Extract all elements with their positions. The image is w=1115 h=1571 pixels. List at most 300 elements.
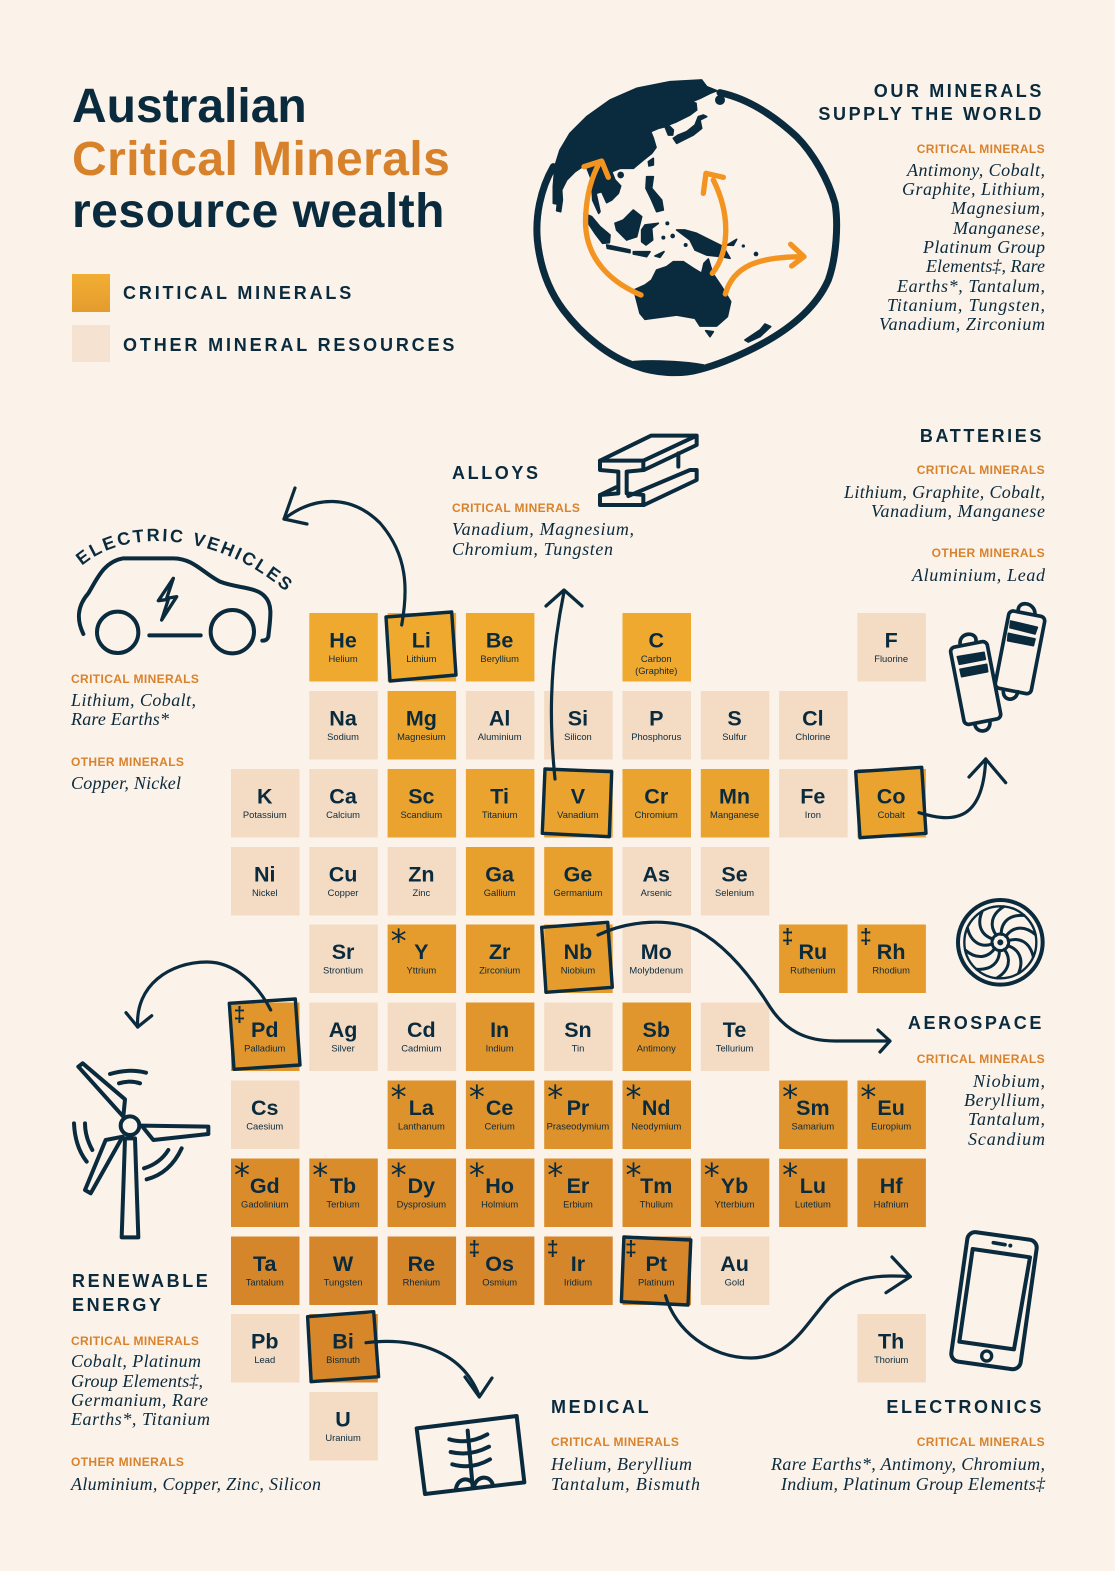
tile: Ga: Ga (485, 862, 515, 886)
tile: Ho: * (469, 1156, 485, 1194)
panel: batteries: BATTERIES (920, 426, 1044, 446)
panel: electric vehicles: Rare Earths* (70, 709, 169, 729)
tile: Na: Sodium (327, 731, 359, 742)
tile: Ti (466, 769, 534, 838)
tile: Ru: Ruthenium (790, 964, 836, 976)
tile: La: * (391, 1078, 407, 1116)
tile: Er: Er (567, 1174, 590, 1198)
panel: aerospace: Tantalum, (968, 1109, 1045, 1129)
tile: Mn (701, 769, 769, 838)
panel: our minerals supply the world: Graphite, Lithium, (902, 179, 1045, 199)
tile: Dy (388, 1156, 456, 1227)
tile: Gd: Gd (250, 1174, 280, 1198)
tile: Rh: ‡ (860, 926, 872, 948)
panel: electronics: ELECTRONICS (886, 1397, 1044, 1417)
panel: renewable energy: ENERGY (72, 1295, 164, 1315)
tile: Na: Na (329, 706, 358, 730)
tile: Si: Si (568, 706, 588, 730)
tile: C: (Graphite) (635, 665, 677, 676)
tile: Al: Al (489, 706, 510, 730)
panel: aerospace: CRITICAL MINERALS (917, 1052, 1045, 1066)
tile: Cl: Cl (802, 706, 824, 730)
periodic table tiles (231, 613, 926, 1460)
panel: renewable energy (70, 1271, 321, 1494)
panel: renewable energy: RENEWABLE (72, 1271, 210, 1291)
tile: Ta: Ta (253, 1252, 278, 1276)
tile: Cl: Chlorine (795, 731, 830, 742)
tile: Sn: Sn (564, 1018, 592, 1042)
tile: Hf (857, 1158, 926, 1227)
tile: Se: Se (721, 862, 748, 886)
arrow: cobalt to batteries (919, 759, 1006, 818)
tile: F (857, 613, 926, 682)
legend: CRITICAL MINERALS (123, 283, 354, 303)
tile: Pd: Palladium (244, 1042, 286, 1054)
tile: Sm: Sm (796, 1096, 830, 1120)
tile: Au: Gold (725, 1276, 744, 1288)
tile: Cu: Cu (329, 862, 357, 886)
panel: our minerals supply the world: Manganese, (952, 218, 1045, 238)
tile: Ru: Ru (799, 940, 827, 964)
icon: wind turbine (74, 1063, 208, 1237)
tile: Y: Yttrium (406, 964, 436, 976)
tile: S: S (727, 706, 742, 730)
tile: Ni (231, 847, 300, 916)
tile: Tm: * (626, 1156, 642, 1194)
tile: He (309, 613, 378, 682)
tile: Ge: Germanium (553, 887, 603, 898)
tile: Tb: * (312, 1156, 328, 1194)
panel: our minerals supply the world: Platinum Group (922, 237, 1045, 257)
tile: Mn: Mn (719, 784, 750, 808)
tile: Ca (309, 769, 378, 838)
arrow: niobium to aerospace (598, 922, 890, 1052)
tile: Ca: Ca (329, 784, 358, 808)
tile: Sc (388, 769, 456, 838)
tile: Eu: * (860, 1078, 876, 1116)
tile: Dy: Dysprosium (397, 1198, 446, 1210)
tile: Te (701, 1002, 769, 1071)
tile: Ge (544, 847, 613, 916)
panel: our minerals supply the world: Antimony, Cobalt, (906, 160, 1045, 180)
panel: our minerals supply the world: Earths*, Tantalum, (896, 276, 1045, 296)
tile: Ce: * (469, 1078, 485, 1116)
tile: Sb: Sb (643, 1018, 670, 1042)
panel: batteries: Vanadium, Manganese (871, 501, 1045, 521)
tile: Cr: Cr (644, 784, 669, 808)
panel: our minerals supply the world: CRITICAL MINERALS (917, 142, 1045, 156)
tile: Pd: Pd (251, 1018, 278, 1042)
tile: Sr (309, 924, 378, 993)
icon: batteries (950, 604, 1045, 731)
tile: Tb: Tb (330, 1174, 356, 1198)
panel: our minerals supply the world: SUPPLY THE WORLD (818, 104, 1044, 124)
tile: Cd: Cd (407, 1018, 436, 1042)
panel: aerospace: Beryllium, (964, 1090, 1045, 1110)
tile: P (622, 691, 691, 760)
tile: Eu (857, 1078, 926, 1149)
tile: Sc: Sc (408, 784, 435, 808)
panel: alloys: ALLOYS (452, 463, 541, 483)
tile: He: He (329, 628, 357, 652)
tile: Te: Tellurium (716, 1042, 753, 1054)
tile: Ti: Ti (490, 784, 509, 808)
tile: Lu: Lu (800, 1174, 826, 1198)
tile: Lu: Lutetium (795, 1198, 831, 1210)
title (72, 80, 450, 238)
tile: Zr: Zirconium (479, 964, 520, 976)
tile: In (466, 1002, 534, 1071)
tile: Eu: Europium (871, 1120, 911, 1132)
panel: renewable energy: CRITICAL MINERALS (71, 1334, 199, 1348)
tile: Ce: Cerium (485, 1120, 515, 1132)
tile: V: Vanadium (557, 809, 599, 820)
panel: electric vehicles: CRITICAL MINERALS (71, 672, 199, 686)
tile: Te: Te (723, 1018, 746, 1042)
panel: aerospace (908, 1013, 1045, 1149)
legend: OTHER MINERAL RESOURCES (123, 335, 457, 355)
tile: In: In (490, 1018, 509, 1042)
tile: Bi: Bi (332, 1330, 354, 1354)
tile: Fe: Fe (800, 784, 825, 808)
panel: electronics: Rare Earths*, Antimony, Chromium, (770, 1454, 1045, 1474)
tile: Cs: Cs (251, 1096, 279, 1120)
tile: P: P (649, 706, 663, 730)
tile: Hf: Hf (880, 1174, 903, 1198)
tile: Er: Erbium (563, 1198, 593, 1210)
tile: Pt (622, 1236, 691, 1305)
tile: Ru (779, 924, 848, 993)
highlight frames on featured elements (229, 612, 926, 1382)
panel: batteries: Aluminium, Lead (911, 565, 1046, 585)
tile: Th: Thorium (874, 1354, 909, 1365)
tile: C: C (648, 628, 664, 652)
tile: Nb (544, 924, 613, 993)
panel: renewable energy: Germanium, Rare (71, 1390, 208, 1410)
tile: Rh (857, 924, 926, 993)
tile: Se: Selenium (715, 887, 754, 898)
tile: Eu: Eu (877, 1096, 905, 1120)
tile: Li (388, 613, 456, 682)
icon: steel beam (600, 436, 697, 505)
tile: Cu: Copper (328, 887, 358, 898)
tile: Cu (309, 847, 378, 916)
tile: La: Lanthanum (398, 1120, 445, 1132)
panel: medical: CRITICAL MINERALS (551, 1435, 679, 1449)
tile: Na (309, 691, 378, 760)
tile: Mg: Magnesium (397, 731, 446, 742)
tile: Tb (309, 1156, 378, 1227)
tile: Sb: Antimony (637, 1042, 676, 1054)
panel: renewable energy: Cobalt, Platinum (71, 1351, 201, 1371)
tile: Pt: Pt (646, 1252, 667, 1276)
panel: medical (550, 1397, 700, 1494)
tile: Bi (309, 1314, 378, 1382)
tile: Nd: Neodymium (631, 1120, 681, 1132)
panel: batteries: CRITICAL MINERALS (917, 463, 1045, 477)
panel: medical: Helium, Beryllium (550, 1454, 692, 1474)
tile: Rh: Rh (877, 940, 905, 964)
tile: Y: Y (414, 940, 429, 964)
tile: Ag: Ag (329, 1018, 357, 1042)
tile: Fe: Iron (805, 809, 821, 820)
tile: S (701, 691, 769, 760)
tile: Sc: Scandium (400, 809, 442, 820)
arrow: bismuth to medical (366, 1341, 492, 1397)
tile: Ir: ‡ (547, 1238, 559, 1260)
panel: renewable energy: Earths*, Titanium (70, 1409, 210, 1429)
tile: Re (388, 1236, 456, 1305)
tile: Bi: Bismuth (326, 1354, 360, 1365)
tile: Ta: Tantalum (246, 1276, 284, 1288)
tile: As (622, 847, 691, 916)
tile: Lu (779, 1156, 848, 1227)
panel: aerospace: Niobium, (972, 1071, 1045, 1091)
panel: our minerals supply the world: Vanadium, Zirconium (879, 314, 1045, 334)
tile: Be: Be (486, 628, 513, 652)
tile: Ni: Ni (254, 862, 276, 886)
tile: Y: * (391, 922, 407, 960)
tile: Cs: Caesium (246, 1120, 283, 1132)
tile: Os (466, 1236, 534, 1305)
legend (72, 274, 457, 362)
tile: U: U (335, 1408, 351, 1432)
panel: alloys: Vanadium, Magnesium, (452, 519, 634, 539)
tile: He: Helium (328, 653, 358, 664)
tile: Mg: Mg (406, 706, 437, 730)
tile: Rh: Rhodium (872, 964, 910, 976)
tile: Cr: Chromium (635, 809, 678, 820)
tile: Cs (231, 1080, 300, 1149)
tile: Os: Os (485, 1252, 514, 1276)
tile: Dy: * (391, 1156, 407, 1194)
panel: batteries: Lithium, Graphite, Cobalt, (843, 482, 1045, 502)
tile: U (309, 1392, 378, 1460)
tile: Se (701, 847, 769, 916)
tile: S: Sulfur (722, 731, 747, 742)
icon: electric car (79, 558, 270, 653)
tile: As: Arsenic (641, 887, 672, 898)
tile: Si: Silicon (564, 731, 592, 742)
tile: Er: * (547, 1156, 563, 1194)
tile: Pt: Platinum (638, 1276, 675, 1288)
icon: turbine (958, 900, 1043, 985)
tile: Zr (466, 924, 534, 993)
tile: Co: Cobalt (878, 809, 905, 820)
tile: Pb (231, 1314, 300, 1382)
icon: x-ray (417, 1416, 524, 1494)
tile: Ho (466, 1156, 534, 1227)
tile: Yb (701, 1156, 769, 1227)
arrow: palladium to renewable energy (126, 962, 271, 1027)
panel: alloys: Chromium, Tungsten (452, 539, 613, 559)
tile: C: Carbon (641, 653, 672, 664)
tile: Mo: Mo (641, 940, 672, 964)
title: Australian (72, 80, 307, 133)
tile: Pb: Pb (251, 1330, 278, 1354)
tile: Pr: Praseodymium (547, 1120, 609, 1132)
tile: Co (857, 769, 926, 838)
tile: Ni: Nickel (252, 887, 278, 898)
tile: Be (466, 613, 534, 682)
tile: Co: Co (877, 784, 905, 808)
tile: Re: Re (408, 1252, 435, 1276)
panel: alloys (452, 463, 634, 559)
tile: Mg (388, 691, 456, 760)
panel: electric vehicles: ELECTRIC VEHICLES (75, 528, 292, 590)
tile: Nb: Niobium (561, 964, 595, 976)
tile: V (544, 769, 613, 838)
tile: Cd: Cadmium (401, 1042, 442, 1054)
tile: Sn: Tin (572, 1042, 584, 1054)
tile: Ge: Ge (564, 862, 592, 886)
tile: Zn: Zn (408, 862, 434, 886)
tile: Al (466, 691, 534, 760)
panel: renewable energy: Aluminium, Copper, Zinc, Silicon (70, 1474, 321, 1494)
tile: Li: Lithium (406, 653, 437, 664)
tile: Sr: Sr (332, 940, 355, 964)
tile: Sb (622, 1002, 691, 1071)
tile: Yb: Yb (721, 1174, 748, 1198)
panel: our minerals supply the world: Magnesium, (950, 198, 1045, 218)
tile: K: Potassium (243, 809, 287, 820)
panel: alloys: CRITICAL MINERALS (452, 501, 580, 515)
tile: Ho: Ho (485, 1174, 514, 1198)
tile: Tm: Tm (640, 1174, 672, 1198)
tile: Th (857, 1314, 926, 1382)
tile: Ti: Titanium (482, 809, 518, 820)
tile: V: V (571, 784, 586, 808)
title: Critical Minerals (72, 133, 450, 186)
tile: Ir (544, 1236, 613, 1305)
tile: Ce: Ce (486, 1096, 513, 1120)
tile: C (622, 613, 691, 682)
tile: Ho: Holmium (481, 1198, 518, 1210)
tile: K (231, 769, 300, 838)
tile: Pd (231, 1002, 300, 1071)
tile: F: F (885, 628, 898, 652)
tile: Sm: * (782, 1078, 798, 1116)
panel: electric vehicles: OTHER MINERALS (71, 755, 184, 769)
panel: aerospace: AEROSPACE (908, 1013, 1044, 1033)
tile: Nd: Nd (642, 1096, 671, 1120)
tile: Y (388, 922, 456, 993)
tile: As: As (643, 862, 670, 886)
title: resource wealth (72, 185, 445, 238)
tile: In: Indium (486, 1042, 514, 1054)
globe map with export arrows (537, 80, 837, 373)
tile: F: Fluorine (874, 653, 908, 664)
tile: Pr: Pr (567, 1096, 590, 1120)
tile: Ta (231, 1236, 300, 1305)
tile: Tm (622, 1156, 691, 1227)
tile: Nb: Nb (564, 940, 592, 964)
tile: La: La (409, 1096, 435, 1120)
tile: Ir: Ir (571, 1252, 586, 1276)
tile: Be: Beryllium (480, 653, 519, 664)
panel: our minerals supply the world: Titanium, Tungsten, (887, 295, 1045, 315)
tile: Cr (622, 769, 691, 838)
panel: electronics: Indium, Platinum Group Elements‡ (780, 1474, 1046, 1494)
tile: Cl (779, 691, 848, 760)
tile: Yb: * (704, 1156, 720, 1194)
panel: our minerals supply the world: Elements‡, Rare (925, 256, 1045, 276)
panel: electronics (770, 1397, 1046, 1494)
tile: Th: Th (878, 1330, 904, 1354)
tile: W (309, 1236, 378, 1305)
arrow: lithium to electric vehicles (284, 488, 405, 625)
tile: Ru: ‡ (782, 926, 793, 948)
tile: Ir: Iridium (564, 1276, 592, 1288)
tile: Mo: Molybdenum (629, 964, 683, 976)
icon: smartphone (950, 1231, 1038, 1370)
panel: electronics: CRITICAL MINERALS (917, 1435, 1045, 1449)
tile: La (388, 1078, 456, 1149)
tile: Dy: Dy (408, 1174, 435, 1198)
tile: Ga: Gallium (484, 887, 516, 898)
tile: Sn (544, 1002, 613, 1071)
tile: Si (544, 691, 613, 760)
tile: Os: ‡ (469, 1238, 480, 1260)
tile: Gd (231, 1156, 300, 1227)
tile: Hf: Hafnium (874, 1198, 909, 1210)
tile: U: Uranium (325, 1432, 361, 1443)
tile: Sm: Samarium (791, 1120, 834, 1132)
tile: Yb: Ytterbium (714, 1198, 755, 1210)
tile: Tb: Terbium (326, 1198, 360, 1210)
tile: Nd (622, 1078, 691, 1149)
tile: Lu: * (782, 1156, 798, 1194)
tile: Pd: ‡ (234, 1004, 245, 1026)
tile: Al: Aluminium (478, 731, 522, 742)
panel: electric vehicles: Lithium, Cobalt, (70, 690, 196, 710)
tile: P: Phosphorus (631, 731, 682, 742)
tile: Pr: * (547, 1078, 563, 1116)
tile: Zr: Zr (489, 940, 511, 964)
panel: electric vehicles (70, 528, 292, 793)
tile: Fe (779, 769, 848, 838)
tile: Er (544, 1156, 613, 1227)
panel: electric vehicles: Copper, Nickel (71, 773, 181, 793)
tile: Au: Au (720, 1252, 749, 1276)
tile: Zn (388, 847, 456, 916)
tile: Re: Rhenium (403, 1276, 440, 1288)
panel: batteries: OTHER MINERALS (932, 546, 1045, 560)
tile: Nd: * (626, 1078, 642, 1116)
panel: our minerals supply the world: OUR MINERALS (874, 81, 1044, 101)
tile: Ca: Calcium (326, 809, 360, 820)
tile: Ga (466, 847, 534, 916)
tile: Zn: Zinc (412, 887, 431, 898)
tile: Sm (779, 1078, 848, 1149)
tile: W: W (333, 1252, 354, 1276)
arrow: vanadium to alloys (546, 590, 582, 779)
tile: Pr (544, 1078, 613, 1149)
tile: Gd: * (234, 1156, 250, 1194)
tile: Os: Osmium (482, 1276, 517, 1288)
panel: renewable energy: OTHER MINERALS (71, 1455, 184, 1469)
panel: aerospace: Scandium (968, 1129, 1045, 1149)
tile: Mn: Manganese (710, 809, 759, 820)
tile: Pt: ‡ (625, 1238, 637, 1260)
panel: our minerals supply the world (818, 81, 1045, 334)
tile: Ag: Silver (331, 1042, 355, 1054)
tile: Tm: Thulium (640, 1198, 673, 1210)
tile: Pb: Lead (254, 1354, 275, 1365)
tile: Cd (388, 1002, 456, 1071)
tile: Gd: Gadolinium (241, 1198, 289, 1210)
tile: Ag (309, 1002, 378, 1071)
